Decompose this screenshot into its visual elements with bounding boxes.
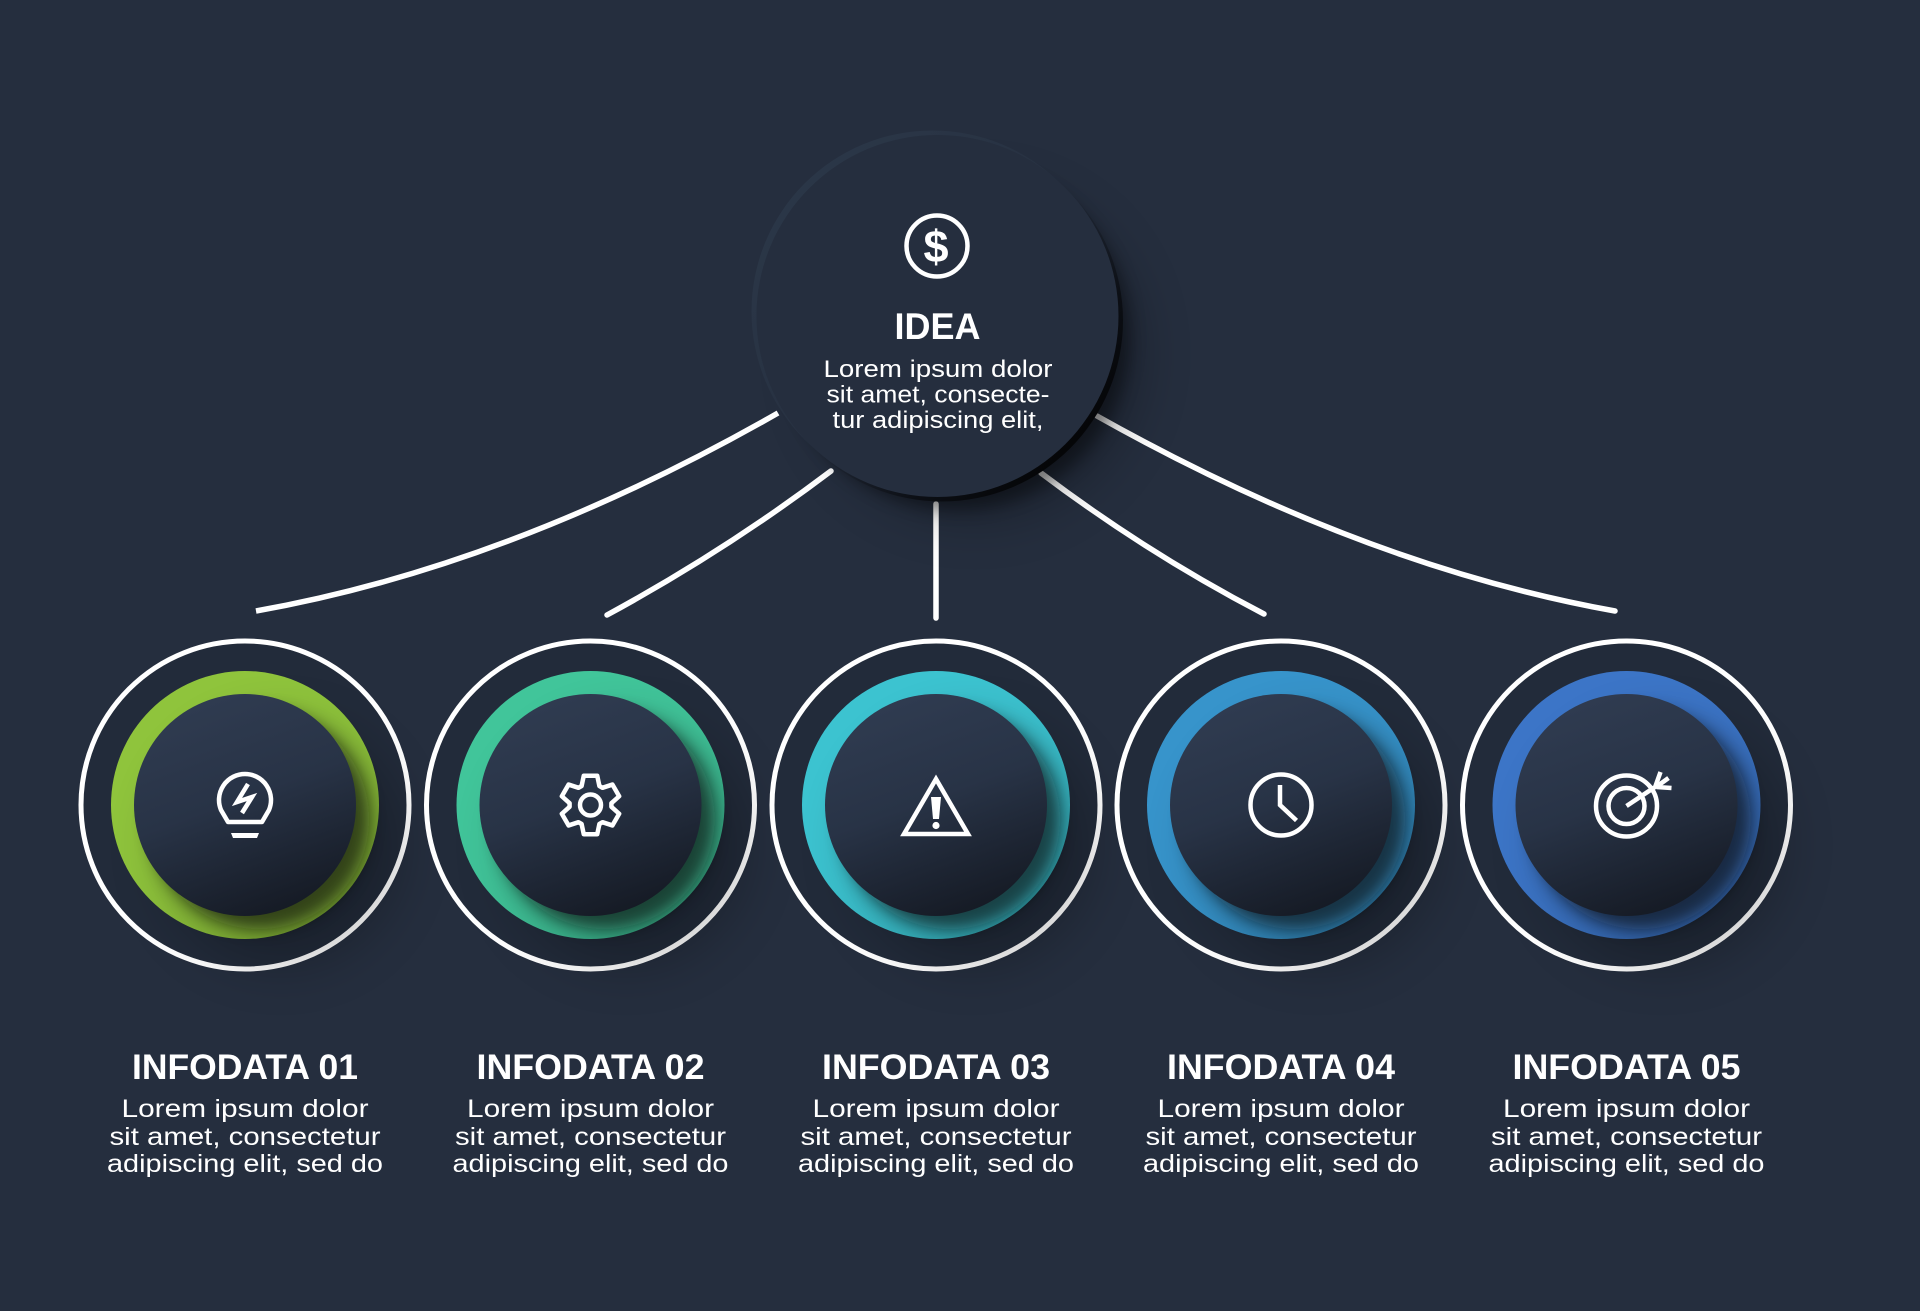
text block: description 02 — [452, 1095, 728, 1178]
panel: item 04 — [1117, 641, 1445, 1178]
text block: description 04: adipiscing elit, sed do — [1143, 1150, 1419, 1178]
text block: idea description — [824, 356, 1053, 434]
text block: description 03: adipiscing elit, sed do — [798, 1150, 1074, 1178]
heading: INFODATA 04: INFODATA 04 — [1167, 1048, 1396, 1087]
text block: description 04: sit amet, consectetur — [1146, 1123, 1416, 1151]
text block: description 01: Lorem ipsum dolor — [122, 1095, 368, 1123]
text block: description 03 — [798, 1095, 1074, 1178]
text block: description 05 — [1488, 1095, 1764, 1178]
icon: light bulb — [219, 774, 271, 838]
text block: description 04 — [1143, 1095, 1419, 1178]
connector to item 05 — [1097, 416, 1615, 611]
connector lines — [256, 413, 1615, 618]
panel: item 03 — [772, 641, 1100, 1178]
text block: description 04: Lorem ipsum dolor — [1158, 1095, 1404, 1123]
connector to item 01 — [256, 413, 778, 611]
central idea panel — [752, 130, 1140, 519]
heading: INFODATA 03: INFODATA 03 — [822, 1048, 1050, 1087]
text block: idea description: tur adipiscing elit, — [832, 407, 1044, 434]
icon: target with arrow — [1596, 772, 1672, 836]
text block: description 05: Lorem ipsum dolor — [1503, 1095, 1750, 1123]
text block: description 03: Lorem ipsum dolor — [812, 1095, 1060, 1123]
text block: description 01: sit amet, consectetur — [110, 1123, 380, 1151]
text block: description 01 — [107, 1095, 383, 1178]
connector to item 02 — [607, 471, 831, 615]
text block: description 02: Lorem ipsum dolor — [467, 1095, 714, 1123]
heading: INFODATA 02: INFODATA 02 — [476, 1048, 704, 1087]
heading: INFODATA 05: INFODATA 05 — [1512, 1048, 1740, 1087]
icon: dollar coin — [906, 216, 968, 276]
panel: item 02 — [426, 641, 754, 1178]
text block: description 05: sit amet, consectetur — [1491, 1123, 1762, 1151]
circle button 04 — [1117, 641, 1445, 969]
heading: INFODATA 01: INFODATA 01 — [132, 1048, 358, 1087]
icon: warning triangle — [904, 779, 968, 834]
icon: dollar coin: $ — [923, 221, 949, 272]
heading: IDEA: IDEA — [894, 306, 980, 347]
icon: clock — [1250, 774, 1312, 836]
connector to item 04 — [1041, 473, 1264, 614]
icon: gear — [562, 776, 619, 834]
text block: description 02: sit amet, consectetur — [455, 1123, 726, 1151]
panel: item 01 — [81, 641, 409, 1178]
circle button 01 — [81, 641, 409, 969]
text block: idea description: Lorem ipsum dolor — [824, 356, 1053, 383]
connector to item 03 — [933, 504, 939, 618]
text block: description 02: adipiscing elit, sed do — [452, 1150, 728, 1178]
panel: item 05 — [1462, 641, 1790, 1178]
text block: description 01: adipiscing elit, sed do — [107, 1150, 383, 1178]
text block: description 03: sit amet, consectetur — [800, 1123, 1072, 1151]
circle button 02 — [426, 641, 754, 969]
text block: description 05: adipiscing elit, sed do — [1488, 1150, 1764, 1178]
text block: idea description: sit amet, consecte- — [826, 382, 1050, 408]
circle button 05 — [1462, 641, 1790, 969]
circle button 03 — [772, 641, 1100, 969]
